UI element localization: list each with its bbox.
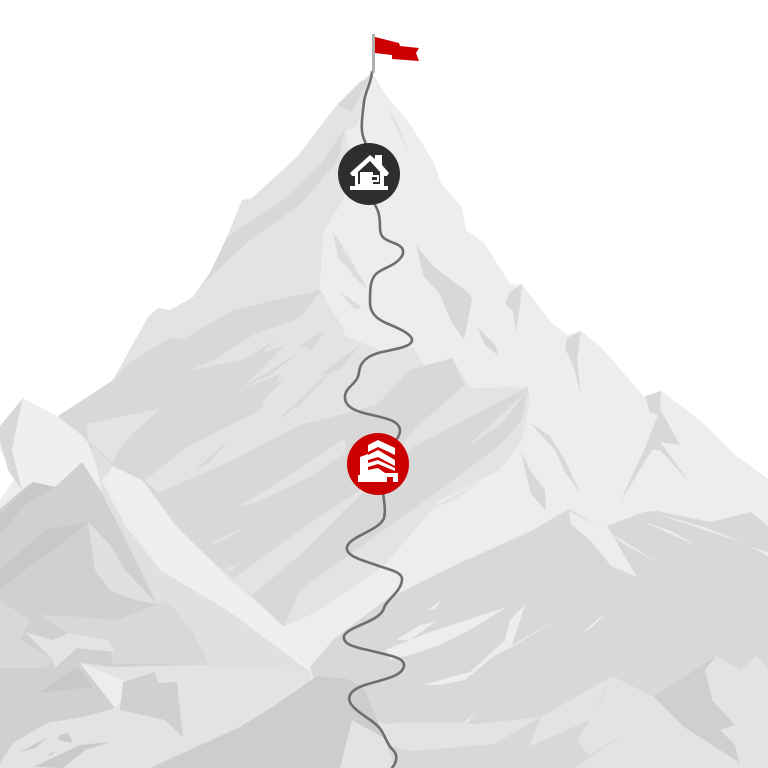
bottom mound and snow band xyxy=(150,676,612,768)
front right mountain xyxy=(310,509,768,768)
snow ridge xyxy=(569,511,637,577)
winding trail xyxy=(344,72,412,768)
flag pole xyxy=(372,34,375,73)
lower snow field xyxy=(282,482,547,667)
main dark slope xyxy=(58,290,528,627)
left foreground slopes xyxy=(0,462,320,768)
right bottom peaks xyxy=(575,656,768,768)
icon: building marker xyxy=(347,433,409,495)
snow streaks on the main face xyxy=(87,292,528,597)
flag xyxy=(372,34,419,73)
flag cloth xyxy=(375,37,419,61)
left snowy peak xyxy=(0,398,113,490)
icon: house marker xyxy=(338,143,400,205)
